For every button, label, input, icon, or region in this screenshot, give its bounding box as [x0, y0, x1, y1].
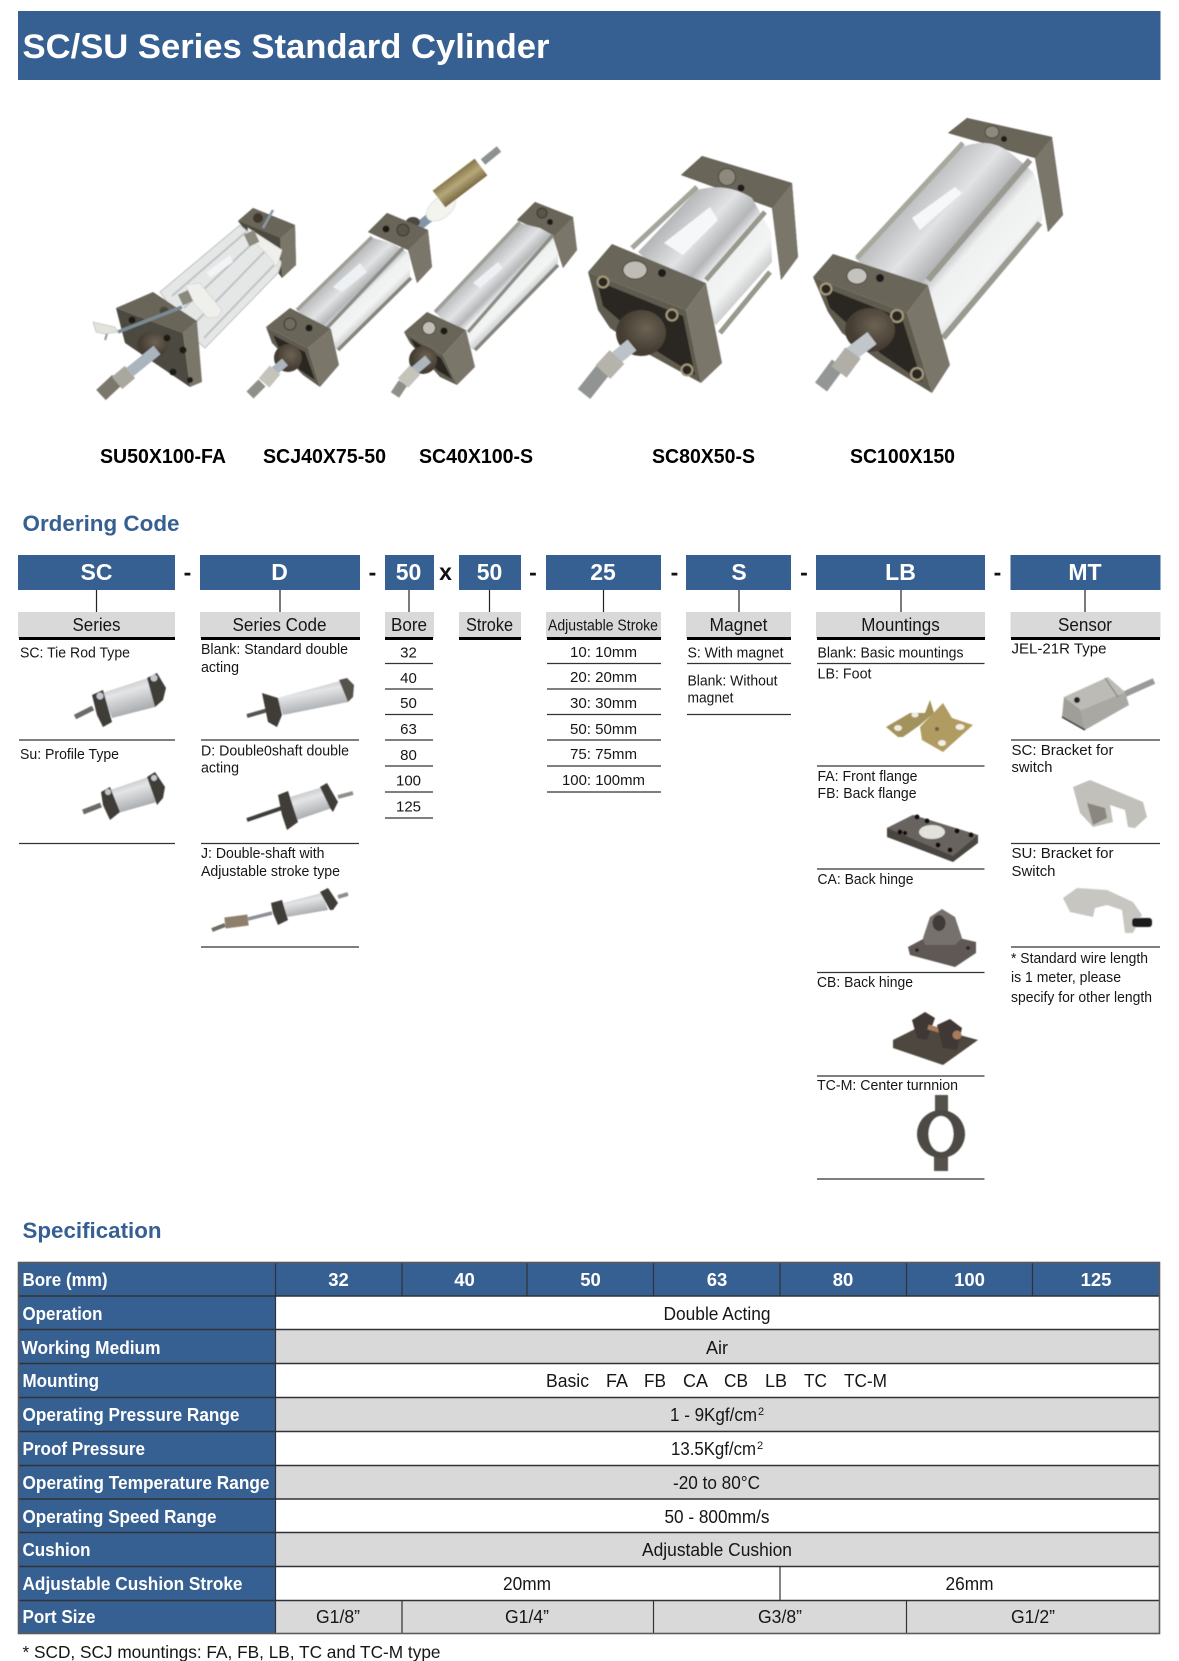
row values: Double Acting — [664, 1303, 770, 1324]
bore size header numbers: 100 — [954, 1269, 985, 1290]
icon: adjustable stroke cylinder — [212, 888, 348, 930]
panel: magnet options: Blank: Without — [688, 672, 778, 690]
panel: bore sizes: 50 — [400, 695, 417, 712]
icon: profile cylinder — [83, 772, 165, 820]
icon: standard double acting cylinder — [247, 678, 354, 727]
panel: series options — [19, 644, 175, 844]
panel: bore sizes — [385, 644, 433, 818]
ordering code blocks: 25 — [590, 559, 616, 585]
panel: sensor options: Switch — [1012, 863, 1056, 880]
title banner — [18, 11, 1160, 80]
ordering code blocks: - — [529, 559, 537, 585]
ordering code blocks: MT — [1068, 559, 1102, 585]
specification table — [18, 1262, 1160, 1634]
row values: G1/8” — [316, 1606, 360, 1627]
panel: sensor options — [1011, 640, 1160, 947]
row values: TC-M — [844, 1370, 887, 1391]
panel: series code options: acting — [201, 760, 239, 776]
row values: FB — [644, 1370, 666, 1391]
panel: bore sizes: 100 — [396, 772, 421, 790]
table backgrounds — [18, 1262, 1160, 1634]
panel: mounting options: Blank: Basic mountings — [818, 644, 964, 662]
icon: CA back hinge — [908, 909, 976, 967]
row values: Air — [706, 1337, 728, 1358]
model labels — [100, 446, 955, 468]
panel: adjustable stroke options: 75: 75mm — [570, 746, 637, 763]
bore size header numbers: 125 — [1081, 1269, 1111, 1290]
ordering code blocks: x — [439, 559, 452, 585]
model labels: SC80X50-S — [652, 446, 755, 468]
row labels: Working Medium — [22, 1337, 160, 1358]
panel: bore sizes: 32 — [400, 644, 417, 662]
bore size header numbers: 32 — [328, 1269, 349, 1290]
panel: magnet options: S: With magnet — [688, 644, 784, 662]
ordering code blocks: LB — [885, 559, 916, 585]
row values: 2 — [758, 1406, 764, 1418]
panel: mounting options: FB: Back flange — [818, 785, 916, 802]
ordering code blocks: D — [271, 559, 288, 585]
row labels: Proof Pressure — [22, 1438, 145, 1459]
row values — [316, 1303, 1055, 1627]
row labels: Bore (mm) — [22, 1269, 108, 1290]
product photo: SC100X150 cylinder — [813, 118, 1063, 393]
panel: bore sizes: 63 — [400, 721, 417, 738]
row values: 2 — [757, 1440, 763, 1452]
row labels: Mounting — [22, 1370, 99, 1391]
panel: series code options: J: Double-shaft with — [201, 845, 324, 862]
row values: G3/8” — [758, 1606, 802, 1627]
ordering code blocks: 50 — [477, 559, 502, 585]
note: wire length: * Standard wire length — [1011, 950, 1148, 967]
ordering code blocks: S — [731, 559, 747, 585]
column headers with connectors: Adjustable Stroke — [548, 618, 658, 634]
panel: magnet options — [687, 644, 791, 714]
column headers with connectors: Bore — [391, 615, 427, 635]
row labels: Operation — [22, 1303, 102, 1324]
bore size header numbers: 80 — [833, 1269, 853, 1290]
row labels: Port Size — [22, 1606, 96, 1627]
panel: adjustable stroke options: 100: 100mm — [562, 772, 645, 789]
icon: JEL-21R sensor — [1062, 677, 1154, 730]
note: wire length: specify for other length — [1011, 989, 1152, 1006]
ordering code blocks — [18, 555, 1160, 590]
column headers with connectors: Series Code — [232, 615, 326, 635]
panel: adjustable stroke options: 20: 20mm — [570, 669, 637, 686]
column headers with connectors: Sensor — [1058, 615, 1112, 635]
panel: adjustable stroke options — [547, 644, 661, 792]
row values: G1/2” — [1011, 1606, 1055, 1627]
heading: Specification: Specification — [22, 1218, 162, 1243]
bore size header numbers: 50 — [580, 1269, 601, 1290]
bore size header numbers — [328, 1269, 1111, 1290]
panel: series code options: Adjustable stroke type — [201, 863, 340, 880]
row values: Basic — [546, 1370, 589, 1391]
panel: sensor options: SU: Bracket for — [1012, 845, 1114, 862]
panel: mounting options: LB: Foot — [818, 666, 872, 682]
icon: tie rod cylinder — [75, 673, 166, 727]
panel: bore sizes: 125 — [396, 798, 421, 816]
ordering code blocks: - — [800, 559, 808, 585]
product photo: SU50X100-FA cylinder — [93, 208, 296, 395]
row values: TC — [804, 1370, 827, 1391]
heading: Ordering Code: Ordering Code — [22, 511, 180, 536]
row labels: Operating Pressure Range — [22, 1404, 240, 1425]
row values: CB — [724, 1370, 748, 1391]
ordering code blocks: - — [184, 559, 191, 585]
row labels: Operating Temperature Range — [22, 1472, 270, 1493]
bore size header numbers: 63 — [707, 1269, 727, 1290]
panel: bore sizes: 40 — [400, 670, 417, 687]
row values: Adjustable Cushion — [642, 1539, 792, 1560]
row values: 50 - 800mm/s — [664, 1506, 770, 1527]
row values: CA — [683, 1370, 709, 1391]
row labels — [22, 1269, 270, 1627]
panel: series code options — [201, 641, 359, 947]
note: wire length: is 1 meter, please — [1011, 969, 1121, 986]
ordering code blocks: SC — [81, 559, 112, 585]
column headers with connectors: Magnet — [710, 615, 768, 635]
model labels: SC100X150 — [850, 446, 955, 468]
note: wire length — [1011, 950, 1152, 1006]
icon: double shaft cylinder — [247, 783, 353, 830]
model labels: SCJ40X75-50 — [263, 446, 386, 468]
row values: 1 - 9Kgf/cm — [670, 1404, 757, 1425]
title banner: SC/SU Series Standard Cylinder — [22, 28, 550, 66]
panel: series options: Su: Profile Type — [20, 746, 119, 763]
bore size header numbers: 40 — [454, 1269, 475, 1290]
row values: 20mm — [503, 1573, 551, 1594]
model labels: SC40X100-S — [419, 446, 533, 468]
panel: mounting options — [817, 644, 984, 1179]
row values: -20 to 80°C — [673, 1472, 760, 1493]
product photo: SCJ40X75-50 cylinder — [250, 149, 499, 395]
panel: sensor options: SC: Bracket for — [1012, 742, 1114, 759]
panel: adjustable stroke options: 50: 50mm — [570, 721, 637, 738]
panel: adjustable stroke options: 10: 10mm — [570, 644, 637, 661]
row values: FA — [606, 1370, 629, 1391]
row values: 26mm — [946, 1573, 994, 1594]
panel: mounting options: CA: Back hinge — [818, 871, 914, 888]
panel: series code options: acting — [201, 659, 239, 676]
panel: sensor options: switch — [1012, 759, 1052, 776]
model labels: SU50X100-FA — [100, 446, 226, 468]
row labels: Cushion — [22, 1539, 90, 1560]
column headers with connectors: Series — [72, 615, 120, 635]
ordering code blocks: 50 — [396, 559, 421, 585]
product photo: SC80X50-S cylinder — [584, 156, 798, 394]
panel: series code options: D: Double0shaft double — [201, 742, 349, 760]
icon: foot mounting — [886, 700, 973, 752]
panel: mounting options: FA: Front flange — [818, 768, 918, 785]
ordering code blocks: - — [671, 559, 678, 585]
row values: G1/4” — [505, 1606, 549, 1627]
ordering code blocks: - — [369, 559, 376, 585]
icon: SC switch bracket — [1073, 780, 1147, 828]
panel: adjustable stroke options: 30: 30mm — [570, 695, 637, 712]
column headers with connectors: Stroke — [466, 615, 513, 635]
panel: sensor options: JEL-21R Type — [1012, 640, 1106, 658]
panel: bore sizes: 80 — [400, 747, 417, 764]
column headers with connectors: Mountings — [861, 615, 940, 635]
panel: mounting options: TC-M: Center turnnion — [817, 1077, 958, 1094]
row values: 13.5Kgf/cm — [671, 1438, 756, 1459]
icon: center trunnion — [917, 1095, 965, 1171]
product photo: SC40X100-S cylinder — [395, 202, 577, 395]
row values: LB — [765, 1370, 787, 1391]
panel: series options: SC: Tie Rod Type — [20, 644, 130, 662]
icon: SU switch bracket — [1063, 888, 1152, 933]
icon: CB back hinge — [893, 1012, 978, 1065]
row labels: Operating Speed Range — [22, 1506, 216, 1527]
panel: mounting options: CB: Back hinge — [817, 974, 913, 991]
panel: magnet options: magnet — [688, 690, 734, 706]
icon: flange mounting — [887, 814, 978, 862]
ordering code blocks: - — [994, 559, 1001, 585]
column headers with connectors — [18, 590, 1160, 638]
panel: series code options: Blank: Standard double — [201, 641, 348, 658]
row labels: Adjustable Cushion Stroke — [22, 1573, 242, 1594]
